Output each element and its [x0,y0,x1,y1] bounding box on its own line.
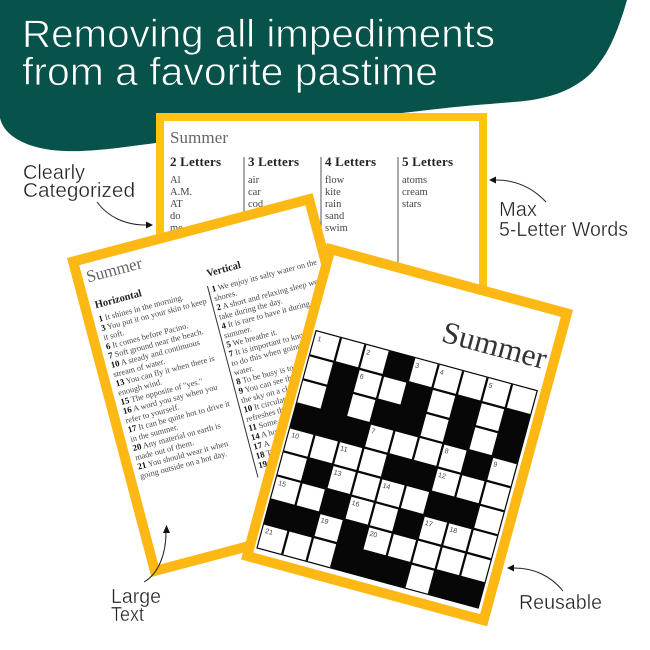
word list title: Summer [170,128,228,147]
label: max 5-letter words [499,199,628,241]
column: 2 letters: do [170,211,180,222]
label: max 5-letter words: 5-Letter Words [499,219,628,241]
grid numbers: 18 [448,527,458,535]
grid numbers: 7 [370,428,376,436]
horizontal clues: in the summer. [129,423,179,444]
grid numbers: 8 [444,448,449,456]
grid numbers: 1 [316,336,322,344]
column: 2 letters [170,154,221,234]
grid numbers: 6 [359,373,365,381]
label: clearly categorized: Categorized [23,180,135,202]
column: 2 letters: A.M. [170,187,192,198]
panel: clues card [67,193,397,577]
vertical clues: summer. [223,324,253,340]
vertical clues: 19 [257,458,269,470]
vertical clues: 14 A ho [250,426,278,442]
label: large text [111,586,161,626]
label: max 5-letter words: Max [499,199,537,221]
vertical clues: take during the day. [218,296,284,322]
horizontal clues: 6 It comes before Pacino. [105,320,189,352]
grid numbers: 21 [264,528,274,537]
panel: word list card [156,113,487,323]
horizontal clues: 16 A word you say when you [122,382,218,416]
label: large text: Text [111,604,144,626]
arrow: to crossword card [507,564,563,591]
title: from a favorite pastime [22,51,438,94]
column: 2 letters: me [170,223,183,234]
grid numbers: 15 [277,480,287,489]
column: 3 letters: 3 Letters [248,154,299,169]
horizontal clues: stream of water. [112,357,166,379]
column: 5 letters: stars [402,199,421,210]
vertical clues: the sky on a clear [240,382,299,405]
column: 4 letters [325,154,376,234]
grid numbers: 14 [382,483,391,492]
horizontal clues: 13 You can fly it when there is [114,353,216,388]
label: clearly categorized: Clearly [23,162,85,184]
column: 5 letters: cream [402,187,428,198]
grid numbers: 20 [369,531,378,539]
column: 4 letters: rain [325,199,342,210]
horizontal clues: refer to yourself. [124,403,180,425]
vertical clues: 17 A [252,438,271,452]
vertical clues: 7 It is important to know how [228,324,326,359]
column: 4 letters: flow [325,175,345,186]
grid numbers: 9 [492,461,498,469]
column: 2 letters: Al [170,175,181,186]
horizontal clues: 17 It can be quite hot to drive it [127,398,231,435]
label: reusable: Reusable [519,592,602,614]
horizontal clues: enough wind. [117,377,163,398]
arrow: to word list right [489,176,546,202]
title [22,13,495,94]
vertical clues: to do this when going in the [230,336,323,368]
horizontal clues: 1 It shines in the morning. [97,292,184,324]
vertical clues: shores. [213,289,238,303]
grid numbers: 2 [365,349,371,357]
column: 2 letters: AT [170,199,183,210]
horizontal clues: going outside on a hot day. [139,449,228,481]
column: 4 letters: swim [325,223,348,234]
column: 4 letters: 4 Letters [325,154,376,169]
arrow: to word list [97,202,153,228]
grid numbers: 16 [351,500,360,509]
horizontal clues: 21 You should wear it when [136,438,230,472]
vertical clues: 11 Some [247,416,278,433]
title: Removing all impediments [22,13,495,56]
grid numbers: 4 [439,369,444,377]
column: 5 letters: 5 Letters [402,154,453,169]
vertical clues: 9 You can see them in [237,367,311,396]
vertical clues: 5 We breathe it. [225,327,278,350]
horizontal clues: it soft. [102,328,125,342]
grid numbers: 3 [414,363,420,370]
vertical clues: water. [233,364,254,377]
horizontal clues: 10 A steady and continuous [110,337,201,370]
column: 3 letters: cod [248,199,264,210]
column: 5 letters [402,154,453,210]
column: 2 letters: 2 Letters [170,154,221,169]
column: 5 letters: atoms [402,175,427,186]
vertical clues: refreshes the [245,404,288,424]
vertical clues: 1 We enjoy its salty water on the [210,256,318,294]
label: large text: Large [111,586,161,608]
grid numbers: 13 [333,469,342,478]
vertical clues: 4 It is rare to have it during the [220,295,323,331]
grid numbers: 5 [488,382,493,390]
grid numbers: 12 [437,472,447,481]
label: clearly categorized [23,162,135,202]
vertical clues: 18 T [255,447,272,461]
column: 4 letters: kite [325,187,341,198]
vertical clues: 10 It circulates and [242,388,307,415]
panel: crossword card [241,243,573,626]
column: 3 letters: air [248,175,260,186]
horizontal clues: 7 Soft ground near the beach. [107,326,204,361]
horizontal clues [94,273,247,481]
horizontal clues: made out of them. [134,438,195,462]
vertical clues: Vertical [205,260,242,280]
grid numbers: 10 [290,432,300,441]
green header blob [0,0,627,151]
column: 3 letters: car [248,187,261,198]
column: 4 letters: sand [325,211,345,222]
grid numbers: 11 [339,445,348,454]
grid numbers: 19 [320,517,329,526]
vertical clues [205,241,365,470]
grid numbers [264,336,518,589]
crossword grid [256,330,538,609]
column: 3 letters [248,154,299,210]
arrow: to clues card [144,525,170,582]
vertical clues: 2 A short and relaxing sleep we [215,276,319,312]
horizontal clues: 15 The opposite of "yes." [119,376,204,407]
horizontal clues: 20 Any material on earth is [131,420,222,453]
horizontal clues: Horizontal [94,288,143,311]
crossword title: Summer [438,314,551,376]
grid numbers: 17 [424,520,433,529]
clues title: Summer [84,253,144,286]
vertical clues: 8 To be busy is to [235,362,294,387]
horizontal clues: 3 You put it on your skin to keep [100,296,208,333]
